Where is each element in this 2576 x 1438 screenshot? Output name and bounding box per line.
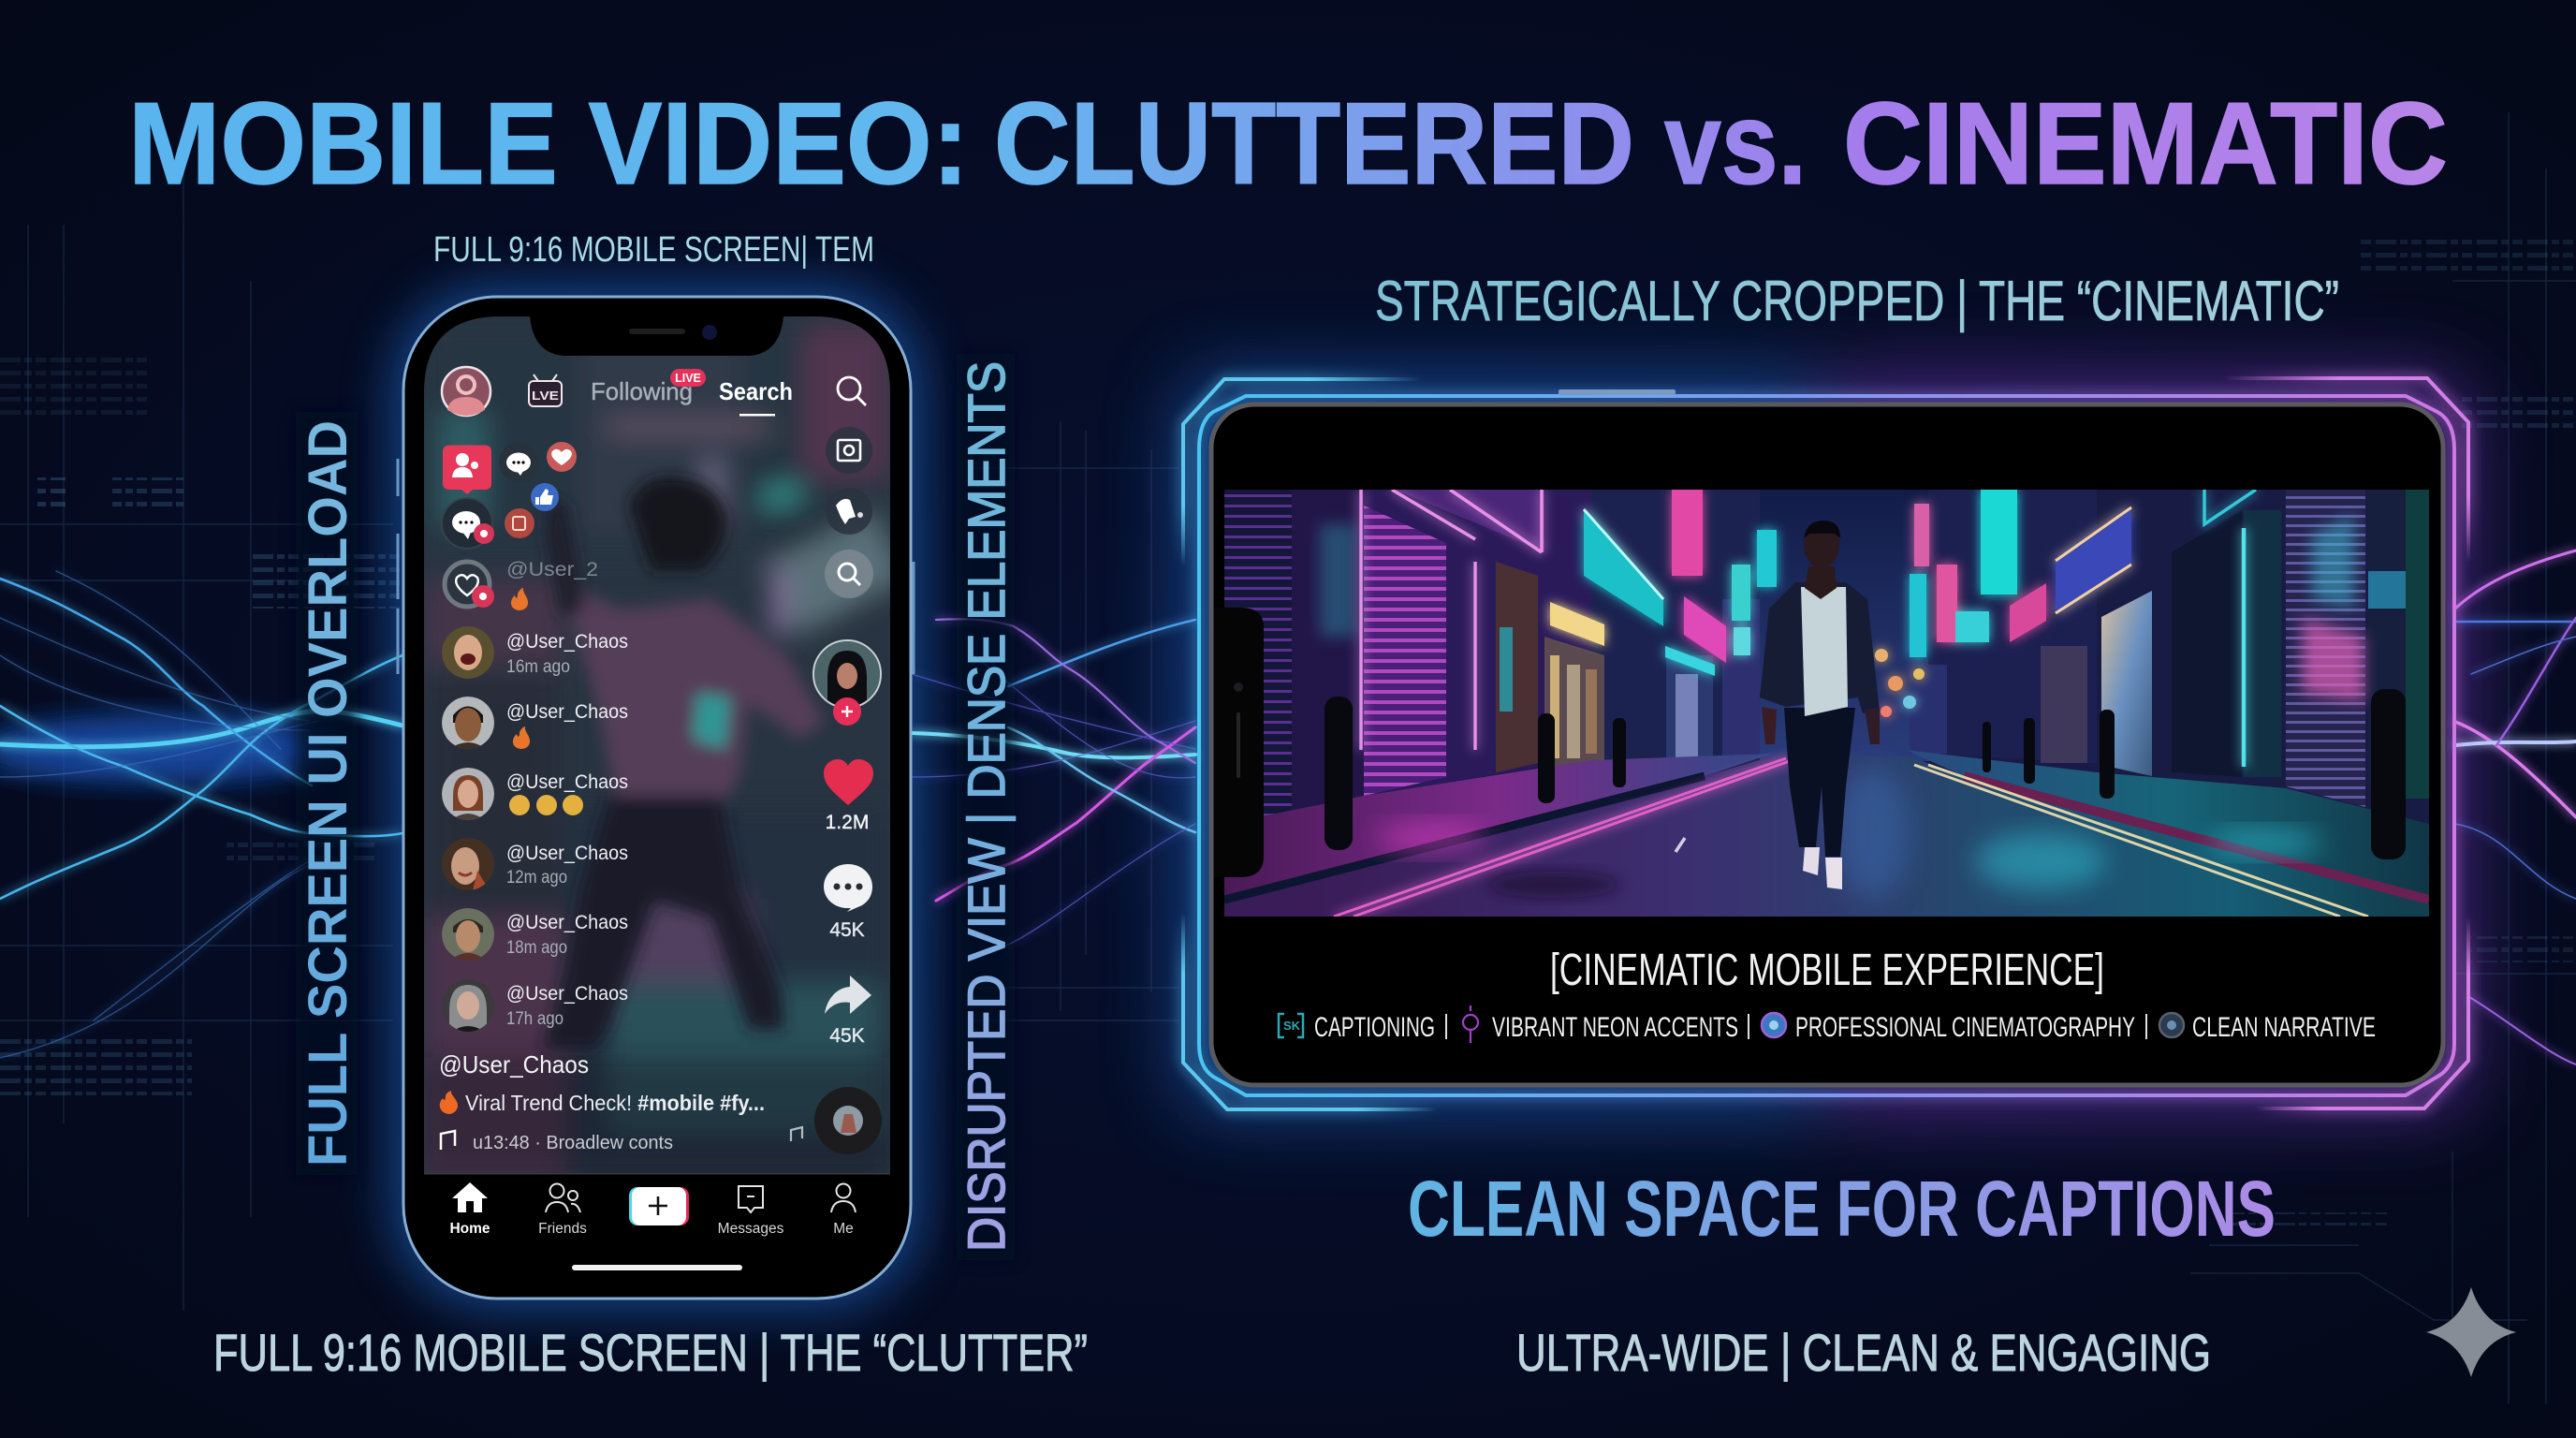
comment 5: 18m ago xyxy=(506,938,567,958)
energy waves: left xyxy=(0,571,402,1058)
headline: clean space: CLEAN SPACE FOR CAPTIONS xyxy=(1408,1165,2276,1253)
title: MOBILE VIDEO: xyxy=(128,80,969,209)
captioning feature: CAPTIONING xyxy=(1314,1012,1435,1043)
neon signs xyxy=(1361,490,2256,767)
nav messages: Messages xyxy=(718,1221,784,1237)
icon: sparkle star xyxy=(2426,1287,2516,1377)
vertical label: right of phone: DISRUPTED VIEW | DENSE ELEMENTS xyxy=(957,361,1016,1252)
title: CLUTTERED xyxy=(994,80,1634,209)
search button xyxy=(839,564,860,585)
footer label: left: FULL 9:16 MOBILE SCREEN | THE “CLUTTER” xyxy=(213,1323,1088,1382)
features row xyxy=(1279,1005,2376,1043)
nav home: Home xyxy=(449,1221,490,1237)
nav friends xyxy=(538,1183,587,1237)
flame xyxy=(440,1091,458,1114)
cinematography feature xyxy=(1762,1012,2147,1043)
music note xyxy=(441,1131,455,1150)
thumbs up xyxy=(531,483,559,511)
device body xyxy=(1211,404,2443,1085)
username: @User_Chaos xyxy=(439,1050,589,1078)
tablet xyxy=(1183,378,2468,1109)
bottom nav xyxy=(424,1173,890,1237)
heart ring xyxy=(445,562,494,608)
search tab xyxy=(719,377,793,416)
notch on side xyxy=(1214,608,1264,877)
notification cluster xyxy=(442,442,577,608)
neon accents feature: VIBRANT NEON ACCENTS xyxy=(1492,1012,1738,1043)
comment 3: @User_Chaos xyxy=(506,771,628,793)
title: vs. xyxy=(1664,80,1807,209)
title xyxy=(128,80,2448,209)
comment button xyxy=(824,864,872,941)
energy waves: centre xyxy=(912,619,1195,946)
sky xyxy=(1760,490,1938,761)
home bar xyxy=(572,1265,742,1270)
heart bubble xyxy=(547,442,577,472)
following tab: Following xyxy=(591,377,693,405)
comment 1 xyxy=(442,626,628,679)
nav me xyxy=(831,1183,856,1237)
comment 4: 12m ago xyxy=(506,868,567,888)
comment 2 xyxy=(442,697,628,751)
creator avatar with follow xyxy=(813,640,881,726)
nav home xyxy=(449,1182,490,1237)
group badge xyxy=(443,446,491,494)
live tv icon: LVE xyxy=(532,389,559,403)
captioning feature: SK xyxy=(1283,1019,1301,1033)
comment button: 45K xyxy=(829,919,865,941)
speaker button xyxy=(836,499,856,524)
street xyxy=(1224,750,2429,917)
search icon xyxy=(838,377,866,405)
neon inner frame xyxy=(1199,396,2454,1095)
description: Viral Trend Check! #mobile #fy... xyxy=(465,1091,765,1115)
on-screen caption: [CINEMATIC MOBILE EXPERIENCE] xyxy=(1550,946,2104,995)
comment 6: 17h ago xyxy=(506,1009,564,1029)
left buildings xyxy=(1224,490,1760,833)
walking man xyxy=(1760,521,1880,889)
nav me: Me xyxy=(833,1221,854,1237)
narrative feature xyxy=(2159,1012,2376,1043)
comment 2: @User_Chaos xyxy=(506,701,628,723)
right buildings xyxy=(1910,490,2429,824)
phone xyxy=(398,297,914,1299)
comment 1: @User_Chaos xyxy=(506,631,628,653)
comment feed xyxy=(442,559,628,1034)
neon outer frame xyxy=(1183,378,2468,1109)
video scene xyxy=(1224,490,2429,917)
blurred video xyxy=(424,316,907,1180)
captioning feature xyxy=(1279,1012,1447,1043)
live badge: LIVE xyxy=(675,372,701,385)
title: CINEMATIC xyxy=(1843,80,2448,209)
comment 5 xyxy=(442,908,628,962)
footer label: right: ULTRA-WIDE | CLEAN & ENGAGING xyxy=(1516,1323,2211,1382)
faded comment: @User_2 xyxy=(506,559,598,580)
glow: tablet halo xyxy=(1179,374,2471,1114)
nav add button xyxy=(629,1187,689,1225)
like button: 1.2M xyxy=(826,812,869,833)
blurred dancer xyxy=(543,477,824,1049)
floating note xyxy=(791,1127,802,1141)
chat bubble small xyxy=(506,453,531,476)
live tv icon xyxy=(529,374,562,406)
share button: 45K xyxy=(829,1025,865,1047)
nav messages xyxy=(718,1186,784,1237)
top bar xyxy=(442,367,866,416)
comment 3 xyxy=(442,768,628,822)
vertical label: left of phone: FULL SCREEN UI OVERLOAD xyxy=(298,420,359,1167)
camera button xyxy=(838,440,860,461)
glow: phone halo xyxy=(391,285,923,1310)
notch xyxy=(530,315,783,356)
video caption block xyxy=(439,1050,765,1153)
comment notification xyxy=(442,498,494,549)
phone body xyxy=(403,297,911,1299)
like button xyxy=(824,759,873,833)
phone side buttons xyxy=(398,459,914,674)
nav friends: Friends xyxy=(538,1221,587,1237)
comment 5: @User_Chaos xyxy=(506,912,628,933)
side quick buttons xyxy=(825,427,873,598)
music disc xyxy=(814,1087,882,1154)
comment 4 xyxy=(442,838,628,891)
faded comment xyxy=(506,559,598,610)
small red icon xyxy=(505,508,534,538)
profile icon xyxy=(442,367,490,416)
top nub xyxy=(1559,389,1676,395)
comment 6: @User_Chaos xyxy=(506,983,628,1005)
neon accents feature xyxy=(1463,1005,1749,1043)
bollards xyxy=(1325,689,2406,859)
energy waves: right xyxy=(2455,550,2576,1064)
live badge xyxy=(670,369,706,387)
cinematography feature: PROFESSIONAL CINEMATOGRAPHY xyxy=(1795,1012,2135,1043)
comment 1: 16m ago xyxy=(506,657,570,677)
label: above phone: FULL 9:16 MOBILE SCREEN| TEM xyxy=(433,230,874,270)
sound line: u13:48 · Broadlew conts xyxy=(473,1133,673,1153)
search tab: Search xyxy=(719,377,793,405)
comment 6 xyxy=(442,979,628,1034)
share button xyxy=(825,976,871,1047)
comment 4: @User_Chaos xyxy=(506,843,628,864)
narrative feature: CLEAN NARRATIVE xyxy=(2192,1012,2376,1043)
